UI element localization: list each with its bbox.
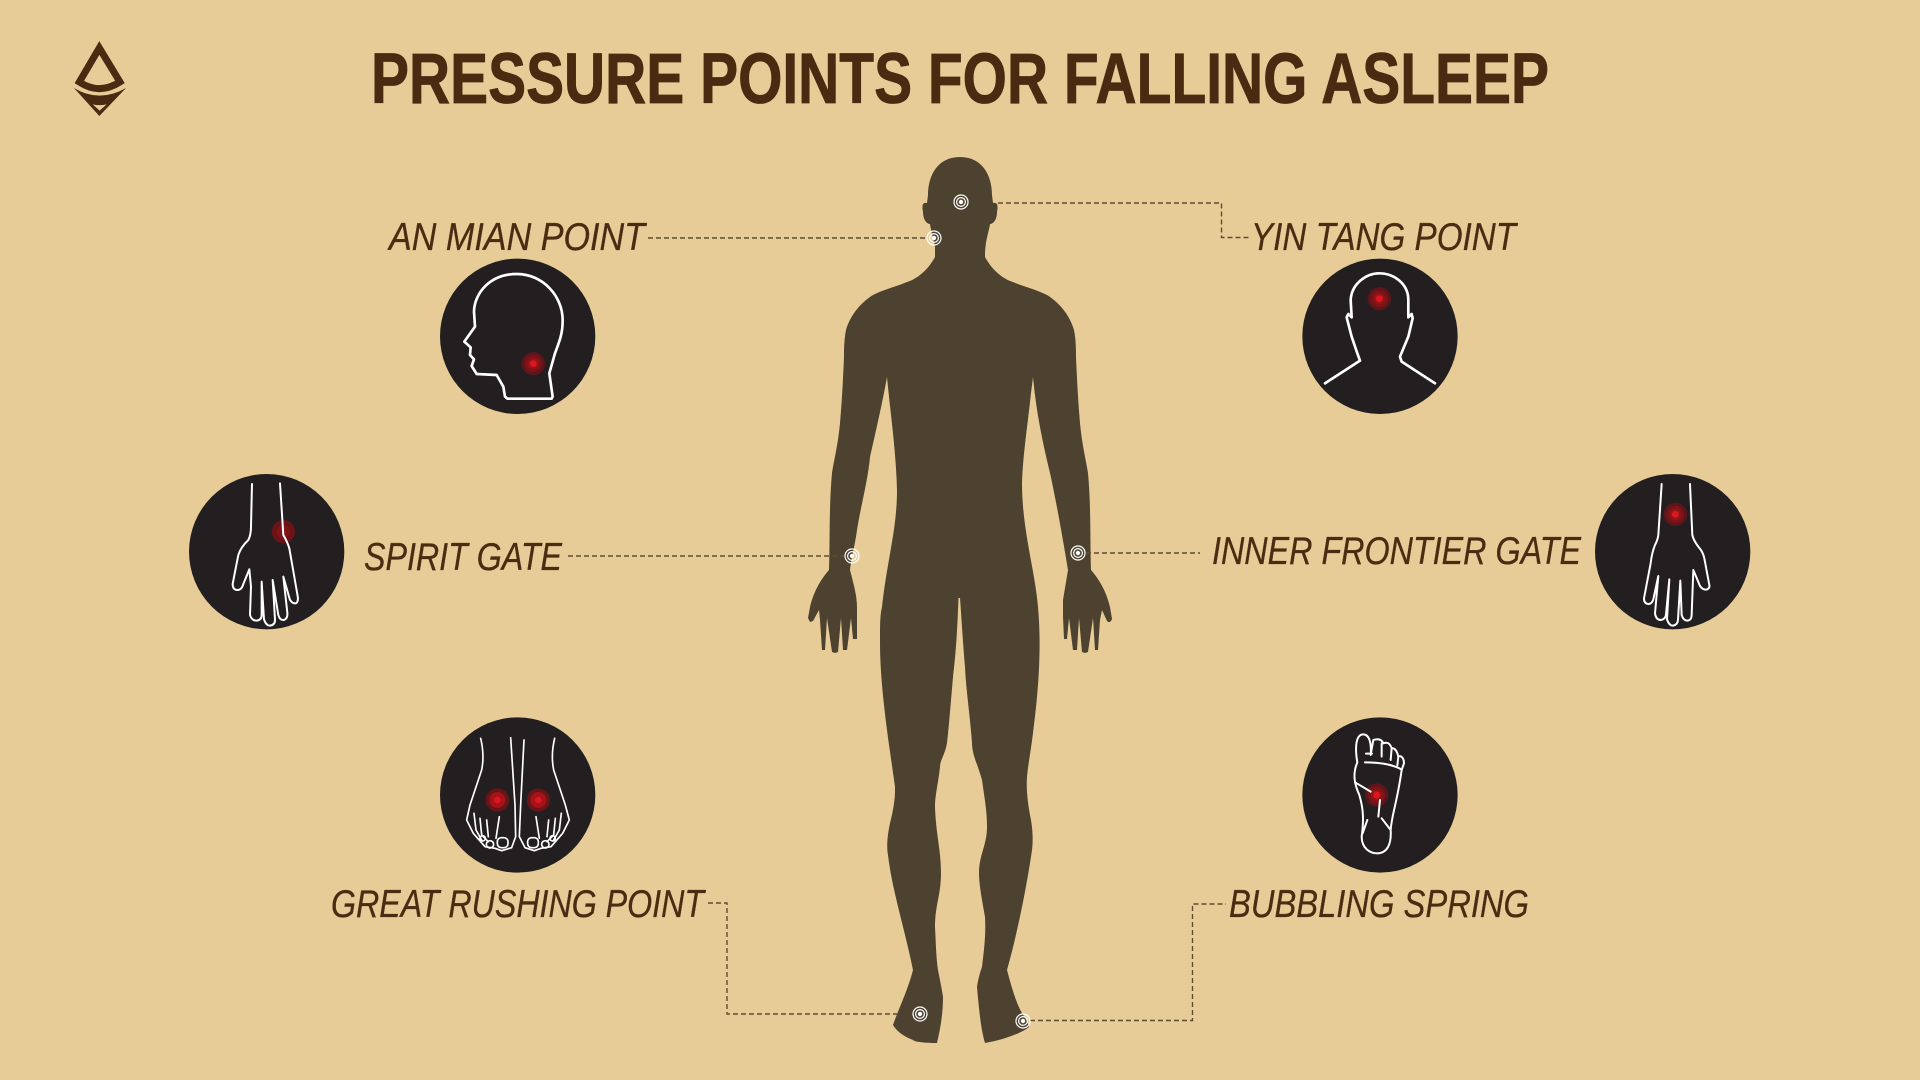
label: Yin Tang Point: YIN TANG POINT (1251, 216, 1519, 259)
connector: Yin Tang (998, 203, 1250, 238)
label: Bubbling Spring: BUBBLING SPRING (1229, 883, 1529, 926)
body silhouette (808, 157, 1112, 1043)
logo icon (74, 48, 126, 116)
body marker: An Mian (927, 231, 941, 245)
connector: Great Rushing Point (708, 903, 898, 1014)
body marker: Great Rushing (913, 1007, 927, 1021)
label: Spirit Gate: SPIRIT GATE (364, 536, 563, 579)
connector: An Mian (648, 237, 928, 239)
body marker: Spirit Gate (845, 549, 859, 563)
icon: head front with point (1302, 259, 1458, 414)
title: PRESSURE POINTS FOR FALLING ASLEEP (371, 40, 1549, 119)
label: Inner Frontier Gate: INNER FRONTIER GATE (1212, 530, 1582, 573)
body marker: Yin Tang (954, 195, 968, 209)
connector: Inner Frontier Gate (1086, 552, 1200, 554)
icon: feet with Great Rushing points (440, 717, 595, 873)
body marker: Bubbling Spring (1016, 1014, 1030, 1028)
icon: head profile with point (440, 259, 595, 414)
icon: foot sole with Bubbling Spring point (1302, 717, 1458, 873)
connector: Bubbling Spring (1030, 904, 1226, 1020)
connector: Spirit Gate (568, 555, 845, 557)
label: An Mian Point: AN MIAN POINT (387, 216, 648, 259)
body marker: Inner Frontier Gate (1071, 546, 1085, 560)
label: Great Rushing Point: GREAT RUSHING POINT (331, 883, 707, 926)
icon: hand with Spirit Gate point (189, 474, 344, 629)
icon: hand with Inner Frontier point (1595, 474, 1750, 629)
